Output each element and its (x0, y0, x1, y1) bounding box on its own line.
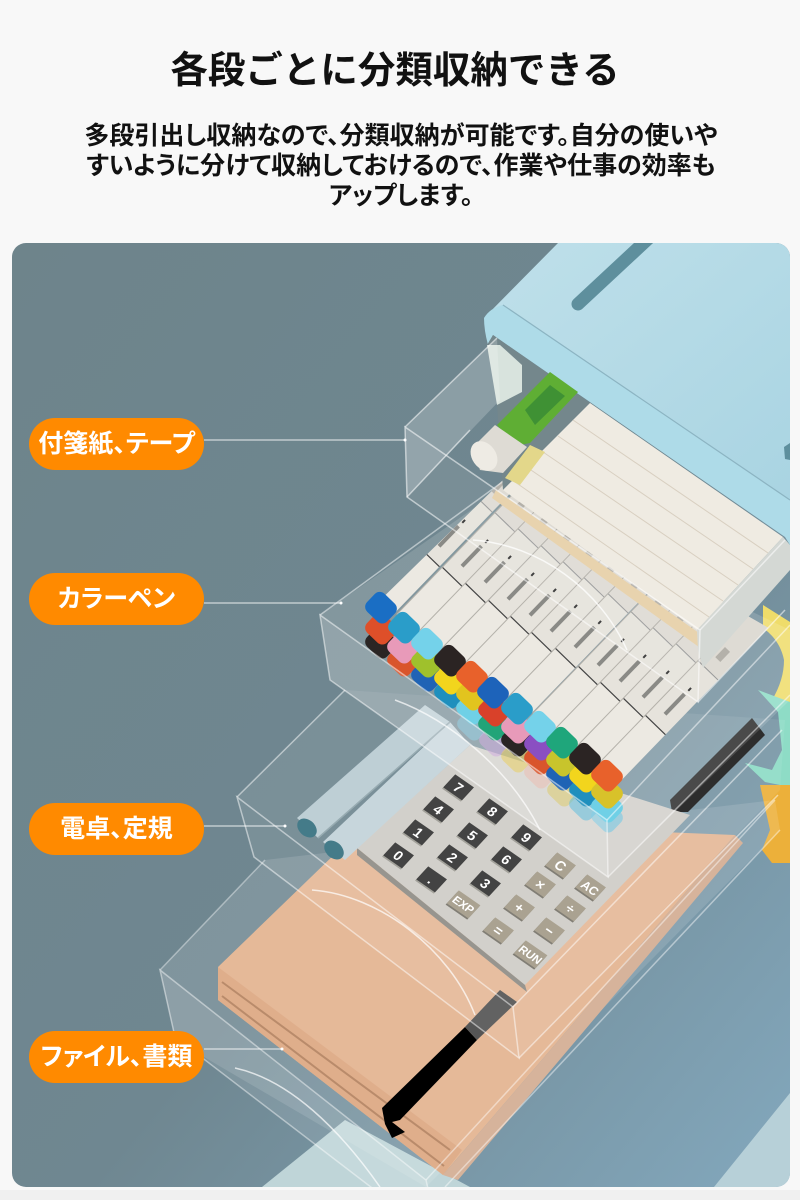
label: calculator and ruler (29, 803, 204, 855)
description text: すいように分けて収納しておけるので、作業や仕事の効率も (86, 152, 716, 180)
keys: RUN (515, 944, 544, 967)
box front face (484, 305, 790, 545)
caps row 1 (362, 589, 626, 794)
keys: C (551, 857, 570, 874)
glue stick (465, 372, 578, 485)
black elastic band upper (670, 718, 765, 812)
keys: EXP (449, 894, 476, 917)
side handle: yellow (763, 605, 790, 705)
label: color pens (29, 573, 204, 625)
photo panel: drawer organizer (12, 243, 790, 1187)
side handle: mint (745, 690, 790, 787)
keys: 0 (390, 847, 407, 864)
box side notch (784, 443, 790, 460)
leader line: sticky notes (204, 438, 406, 442)
label: sticky notes and tape: 付箋紙、テープ (38, 430, 195, 458)
keys: 6 (498, 851, 515, 868)
description text (84, 122, 718, 210)
title: 各段ごとに分類収納できる (170, 49, 620, 91)
bottom strip (0, 1190, 800, 1200)
blue storage box (484, 237, 790, 545)
label: files and documents (29, 1031, 204, 1083)
keys: 9 (518, 829, 535, 846)
description text: アップします。 (329, 182, 473, 210)
wood strip (492, 490, 698, 646)
keys: 4 (430, 801, 447, 818)
keys: − (541, 922, 558, 939)
drawer 3 (237, 690, 785, 1058)
label: color pens: カラーペン (58, 585, 175, 613)
drawer 4 interior (160, 800, 780, 1187)
keys: × (532, 876, 549, 893)
floor corner highlight (714, 1093, 790, 1187)
keys: 8 (484, 803, 501, 820)
drawer 2 (320, 480, 790, 877)
box top slot (578, 237, 650, 304)
marker caps (362, 589, 626, 835)
box inside opening (488, 335, 514, 490)
keys: 3 (477, 875, 494, 892)
leader line: color pens (204, 602, 342, 604)
black elastic band lower (382, 1027, 477, 1138)
ruler pens (293, 705, 470, 863)
description text: 多段引出し収納なので、分類収納が可能です。自分の使いや (84, 122, 718, 150)
keys: 7 (450, 779, 467, 796)
caps row 4 (457, 716, 623, 832)
sticky notes (503, 403, 790, 668)
keys: . (424, 873, 438, 887)
label: sticky notes and tape (29, 418, 204, 470)
keys: + (511, 899, 528, 916)
book: beige file (218, 718, 765, 1180)
label: calculator and ruler: 電卓、定規 (60, 815, 173, 843)
keys: AC (578, 878, 602, 899)
markers (386, 480, 768, 780)
band seen through drawer (465, 990, 517, 1040)
keys: 2 (444, 849, 461, 866)
drawer 2 back tint (320, 494, 790, 810)
drawer 4 front (160, 800, 780, 1200)
keys: ÷ (562, 900, 579, 917)
floor light patch (262, 1120, 470, 1187)
book front spine (218, 967, 462, 1175)
caps row 3 (362, 624, 626, 825)
book lighter page band (443, 835, 743, 1180)
keys: 1 (410, 824, 427, 841)
label: files and documents: ファイル、書類 (41, 1043, 192, 1071)
caps row 2 (362, 610, 626, 811)
leader line: calculator (204, 824, 286, 828)
keys (382, 774, 606, 970)
calculator (357, 745, 690, 992)
panel background (12, 243, 790, 1187)
drawer 1 (405, 338, 785, 702)
keys: 5 (464, 827, 481, 844)
side handle: amber (760, 785, 790, 863)
leader line: files (204, 1048, 284, 1050)
keys: = (490, 922, 507, 939)
